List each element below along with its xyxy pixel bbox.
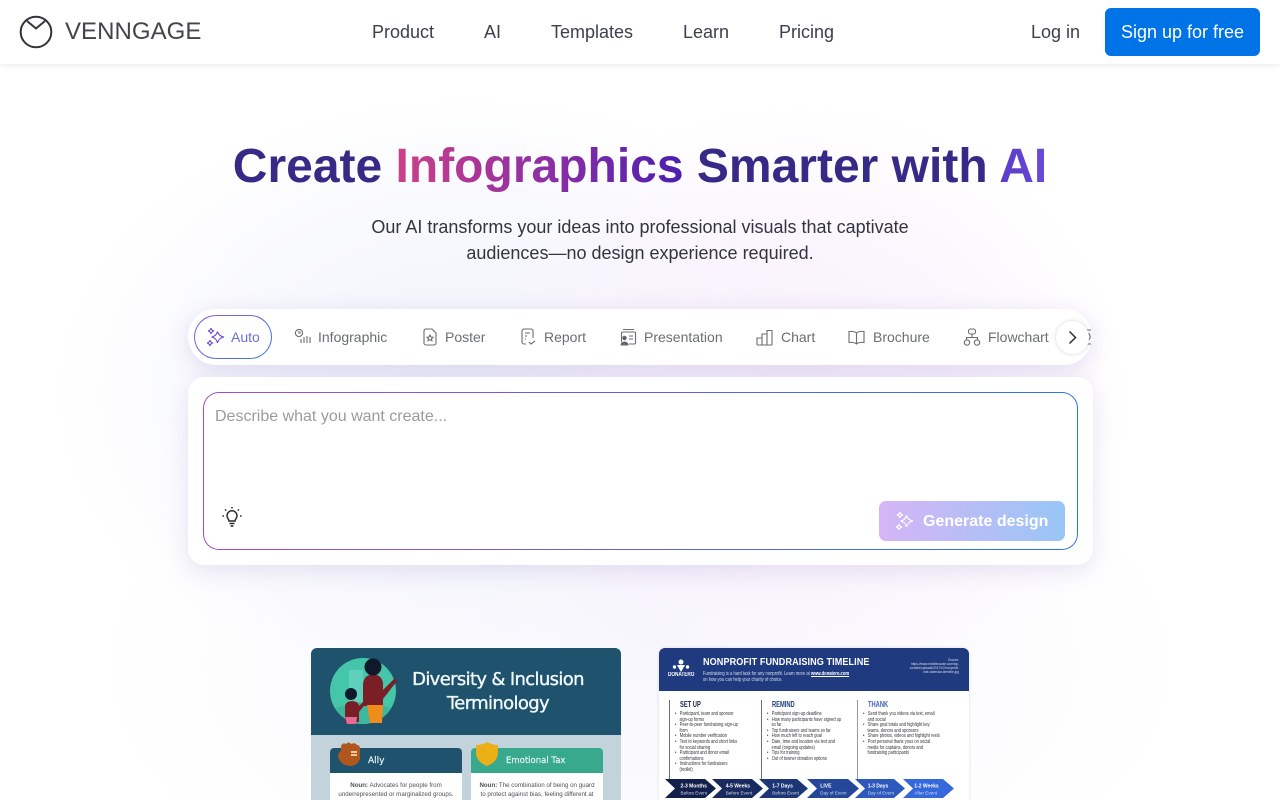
column list: (toolkit): [679, 767, 693, 773]
menu: pricing: Pricing: [779, 22, 834, 42]
column list: form: [679, 728, 688, 734]
card text: underrepresented or marginalized groups.: [338, 791, 454, 798]
menu: learn: Learn: [683, 22, 729, 42]
menu: product: Product: [372, 22, 434, 42]
arrow: 1-2 weeks: After Event: [914, 790, 938, 796]
column list: and social: [867, 717, 886, 723]
column heading: REMIND: [772, 700, 795, 709]
title: Create Infographics Smarter with AI: [233, 140, 1047, 193]
column list: [863, 711, 940, 756]
tab: chart: Chart: [781, 329, 815, 345]
column list: • Top fundraisers and teams so far: [767, 728, 831, 734]
template title: Diversity & Inclusion: [412, 669, 584, 690]
menu: ai: AI: [484, 22, 501, 42]
column list: • Mobile number verification: [675, 733, 727, 739]
column list: • Send thank you videos via text, email: [863, 711, 935, 717]
arrow: 4-5 weeks: 4-5 Weeks: [726, 784, 750, 790]
arrow: 1-3 days: Day of Event: [868, 790, 895, 796]
template title: NONPROFIT FUNDRAISING TIMELINE: [703, 656, 870, 668]
arrow: live: LIVE: [820, 784, 832, 790]
icon: flowchart: [964, 328, 980, 346]
column list: confirmations: [679, 756, 704, 762]
icon: light bulb: [222, 507, 242, 527]
arrow: 4-5 weeks: Before Event: [726, 790, 753, 796]
icon: chart: [756, 330, 773, 346]
arrow: live: [807, 779, 859, 798]
column list: • Out of towner donation options: [767, 756, 827, 762]
arrow: 1-2 weeks: [903, 779, 954, 798]
template intro: Fundraising is a hard task for any nonprofit. Learn more at www.donatero.com: [703, 671, 849, 677]
card text: Noun: The combination of being on guard: [479, 782, 595, 789]
icon: chevron: [1069, 331, 1076, 344]
arrow: 4-5 weeks: [712, 779, 763, 798]
arrow: 2-3 months: 2-3 Months: [680, 784, 707, 790]
source note: https://www.mobilecause.com/wp-: [911, 662, 959, 666]
card heading: Ally: [368, 756, 384, 766]
column list: teams, donors and sponsors: [867, 728, 919, 734]
icon: clipped next tab: [1087, 330, 1091, 344]
subtitle: [371, 217, 909, 263]
source note: ride-calendar-timeline.jpg: [923, 670, 959, 674]
column list: • Tips for training: [767, 750, 800, 756]
card: ally: [330, 748, 462, 800]
card header: [330, 748, 462, 773]
template intro: on how you can help your charity of choice.: [703, 677, 783, 683]
column list: for social sharing: [679, 745, 710, 751]
icon: shield: [476, 742, 498, 766]
placeholder text: Describe what you want create...: [215, 408, 447, 425]
column list: sign-up forms: [679, 717, 704, 723]
column list: • Date, time and location via text and: [767, 739, 835, 745]
panel: fundraising timeline template: [659, 648, 969, 800]
column list: email (ongoing updates): [771, 745, 815, 751]
icon: sparkles: [206, 328, 224, 346]
column list: • Peer-to-peer fundraising sign-up: [675, 722, 738, 728]
timeline arrows: [665, 779, 954, 798]
sign up button: Sign up for free: [1121, 22, 1244, 42]
column list: so far: [771, 722, 782, 728]
panel: prompt card: [188, 377, 1093, 565]
card: emotional tax: [471, 748, 603, 800]
column: set up: [669, 700, 759, 780]
icon: brochure: [848, 330, 865, 345]
card heading: Emotional Tax: [506, 756, 565, 766]
prompt input: [203, 392, 1078, 550]
column: remind: [761, 700, 853, 780]
column heading: SET UP: [680, 700, 701, 709]
card text: [338, 782, 454, 798]
source note: content/uploads/2017/07/nonprofit-: [910, 666, 959, 670]
log in link: Log in: [1031, 22, 1080, 42]
brand: DONATERO: [668, 672, 694, 678]
arrow: 2-3 months: [665, 779, 716, 798]
source note: [910, 658, 959, 674]
arrow: 1-3 days: 1-3 Days: [868, 784, 888, 790]
arrow: 1-7 days: [759, 779, 808, 798]
arrow: 1-7 days: Before Event: [772, 790, 800, 796]
icon: venngage logo: [20, 16, 52, 48]
column list: fundraising participants: [867, 750, 909, 756]
tab: presentation: Presentation: [644, 329, 723, 345]
column heading: THANK: [868, 700, 888, 709]
card text: to protect against bias, feeling different at: [480, 791, 594, 798]
column list: • Participant and donor email: [675, 750, 729, 756]
button: scroll tabs right: [1056, 321, 1089, 354]
column list: [767, 711, 842, 762]
column list: • Share photos, videos and highlight reels: [863, 733, 940, 739]
arrow: live: Day of Event: [820, 790, 847, 796]
column list: • Participant sign-up deadline: [767, 711, 822, 717]
column list: • Instructions for fundraisers: [675, 761, 727, 767]
template title: Terminology: [447, 693, 549, 714]
arrow: 1-7 days: 1-7 Days: [772, 784, 793, 790]
column: thank: [857, 700, 957, 780]
subtitle: Our AI transforms your ideas into professional visuals that captivate: [371, 217, 909, 237]
icon: infographic: [294, 328, 311, 343]
brand name: VENNGAGE: [65, 18, 201, 45]
tab: infographic: Infographic: [318, 329, 387, 345]
panel: design type tabs: [188, 309, 1092, 365]
card text: [479, 782, 595, 798]
template title: [412, 669, 584, 714]
icon: report: [521, 328, 536, 345]
arrow: 1-3 days: [855, 779, 905, 798]
column list: [675, 711, 738, 773]
tab: flowchart: Flowchart: [988, 329, 1049, 345]
label: auto: Auto: [231, 329, 260, 345]
icon: donatero logo: [672, 660, 690, 672]
illustration: parent and child: [330, 658, 397, 724]
generate design button: [879, 501, 1065, 541]
menu: templates: Templates: [551, 22, 633, 42]
template intro: [703, 671, 850, 683]
column list: • Text to keywords and short links: [675, 739, 737, 745]
panel: diversity infographic template: [311, 648, 621, 800]
tab: poster: Poster: [445, 329, 485, 345]
column list: • Participant, team and sponsor: [675, 711, 734, 717]
column list: • Post personal thank yous on social: [863, 739, 930, 745]
label: Generate design: [923, 513, 1048, 530]
card text: Noun: Advocates for people from: [350, 782, 442, 789]
tab: auto: [194, 315, 272, 359]
arrow: 1-2 weeks: 1-2 Weeks: [914, 784, 939, 790]
icon: raised fist: [338, 742, 360, 766]
template header: [659, 648, 969, 691]
column list: • How many participants have signed up: [767, 717, 841, 723]
column list: • How much left to reach goal: [767, 733, 822, 739]
arrow: 2-3 months: Before Event: [680, 790, 708, 796]
icon: sparkles: [896, 512, 914, 530]
template header: [311, 648, 621, 735]
subtitle: audiences—no design experience required.: [466, 243, 814, 263]
card header: [471, 748, 603, 773]
navigation bar: [0, 0, 1280, 64]
sign up button: [1105, 8, 1260, 56]
column list: • Share goal totals and highlight key: [863, 722, 930, 728]
tab: report: Report: [544, 329, 586, 345]
column list: media for captains, donors and: [867, 745, 923, 751]
source note: Source:: [948, 658, 959, 662]
tab: brochure: Brochure: [873, 329, 930, 345]
icon: poster: [423, 328, 437, 346]
icon: presentation: [620, 329, 636, 346]
